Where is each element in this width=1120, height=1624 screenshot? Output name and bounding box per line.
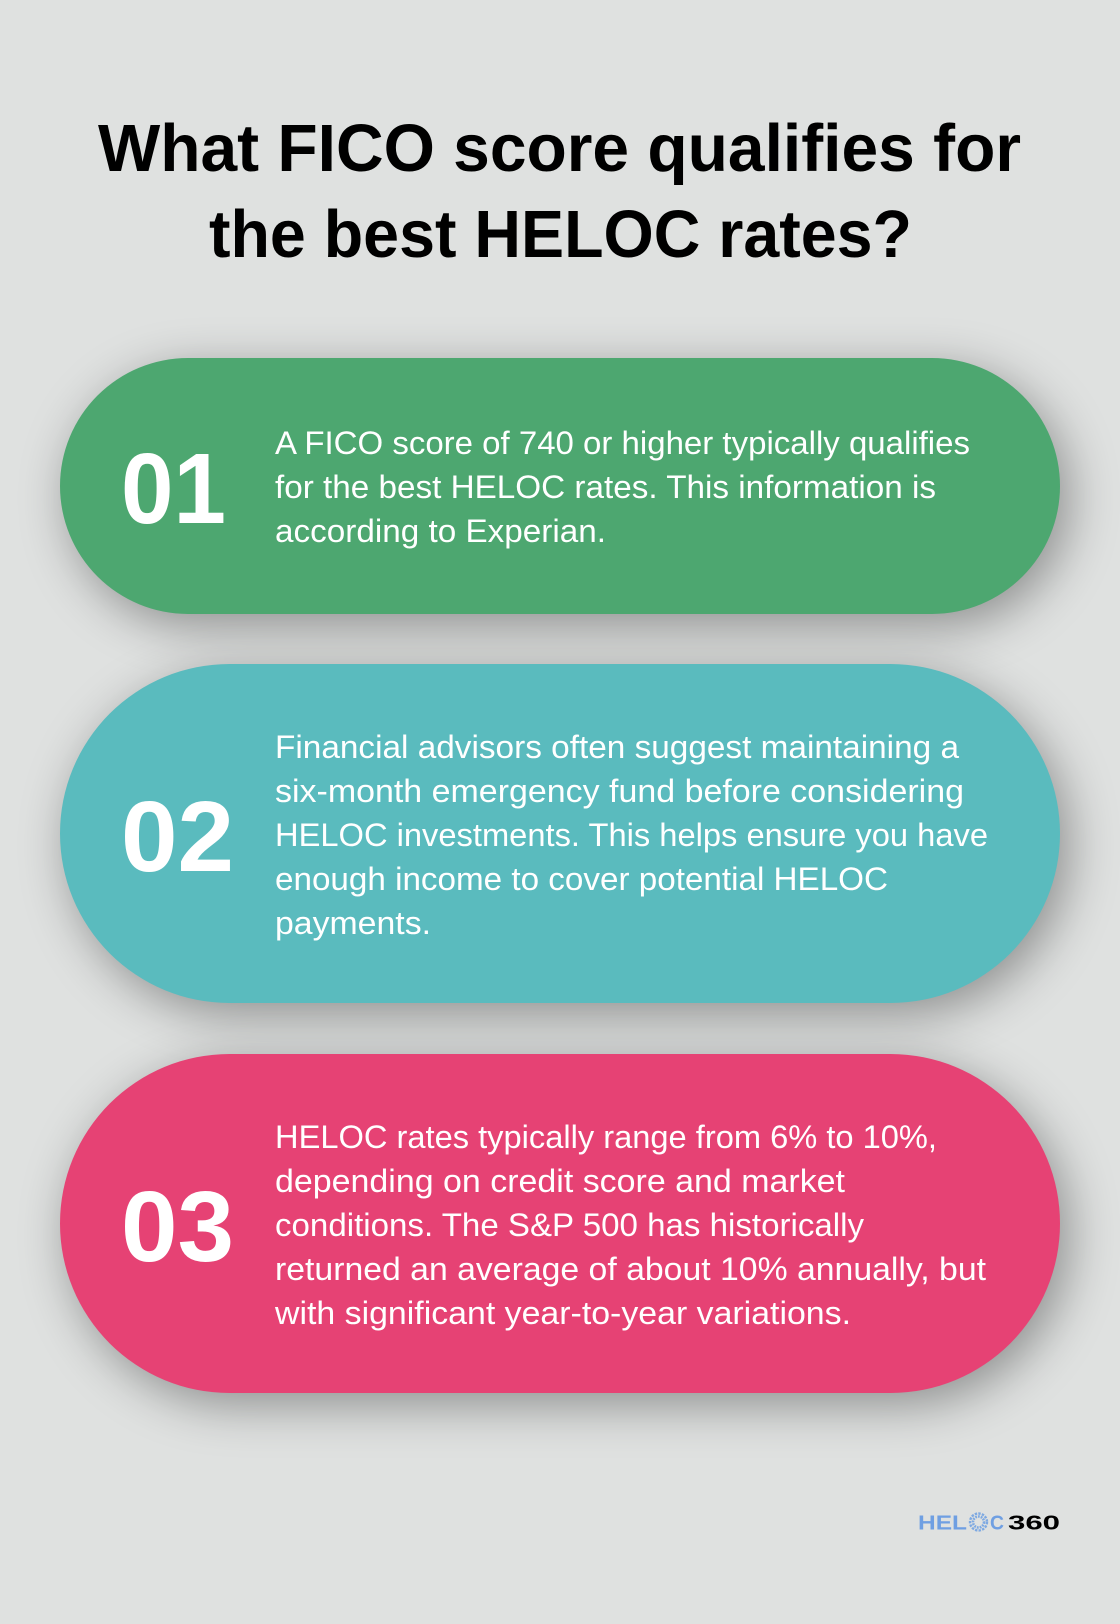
number 02: 02 (121, 781, 234, 893)
text block: step 03: conditions. The S&P 500 has historically (275, 1207, 865, 1243)
text block: step 01: according to Experian. (275, 513, 606, 549)
panel: step 03 pink (60, 1054, 1060, 1393)
number 01: 01 (121, 433, 226, 545)
number 03: 03 (121, 1171, 234, 1283)
text block: step 03: depending on credit score and market (275, 1163, 845, 1199)
text block: step 01: for the best HELOC rates. This information is (275, 469, 936, 505)
text block: step 03 (274, 1119, 986, 1331)
text block: step 03: HELOC rates typically range from 6% to 10%, (275, 1119, 937, 1155)
title: the best HELOC rates? (209, 197, 912, 272)
text block: step 02: HELOC investments. This helps ensure you have (275, 817, 988, 853)
text block: step 03: with significant year-to-year variations. (274, 1295, 851, 1331)
text block: step 02: payments. (275, 905, 431, 941)
logo: HELOC360 (918, 1512, 1060, 1534)
text block: step 01: A FICO score of 740 or higher typically qualifies (275, 425, 970, 461)
text block: step 02: enough income to cover potential HELOC (275, 861, 888, 897)
text block: step 02: six-month emergency fund before considering (275, 773, 964, 809)
icon: swirl O (970, 1514, 987, 1530)
title (98, 111, 1021, 272)
title: What FICO score qualifies for (98, 111, 1021, 186)
panel: step 02 teal (60, 664, 1060, 1003)
text block: step 02: Financial advisors often suggest maintaining a (275, 729, 960, 765)
text block: step 01 (275, 425, 970, 549)
text block: step 02 (275, 729, 988, 941)
text block: step 03: returned an average of about 10% annually, but (275, 1251, 986, 1287)
logo: HELOC360: HEL (918, 1512, 967, 1534)
logo: HELOC360: 360 (1008, 1512, 1060, 1534)
logo: HELOC360: C (990, 1512, 1004, 1534)
panel: step 01 green (60, 358, 1060, 614)
